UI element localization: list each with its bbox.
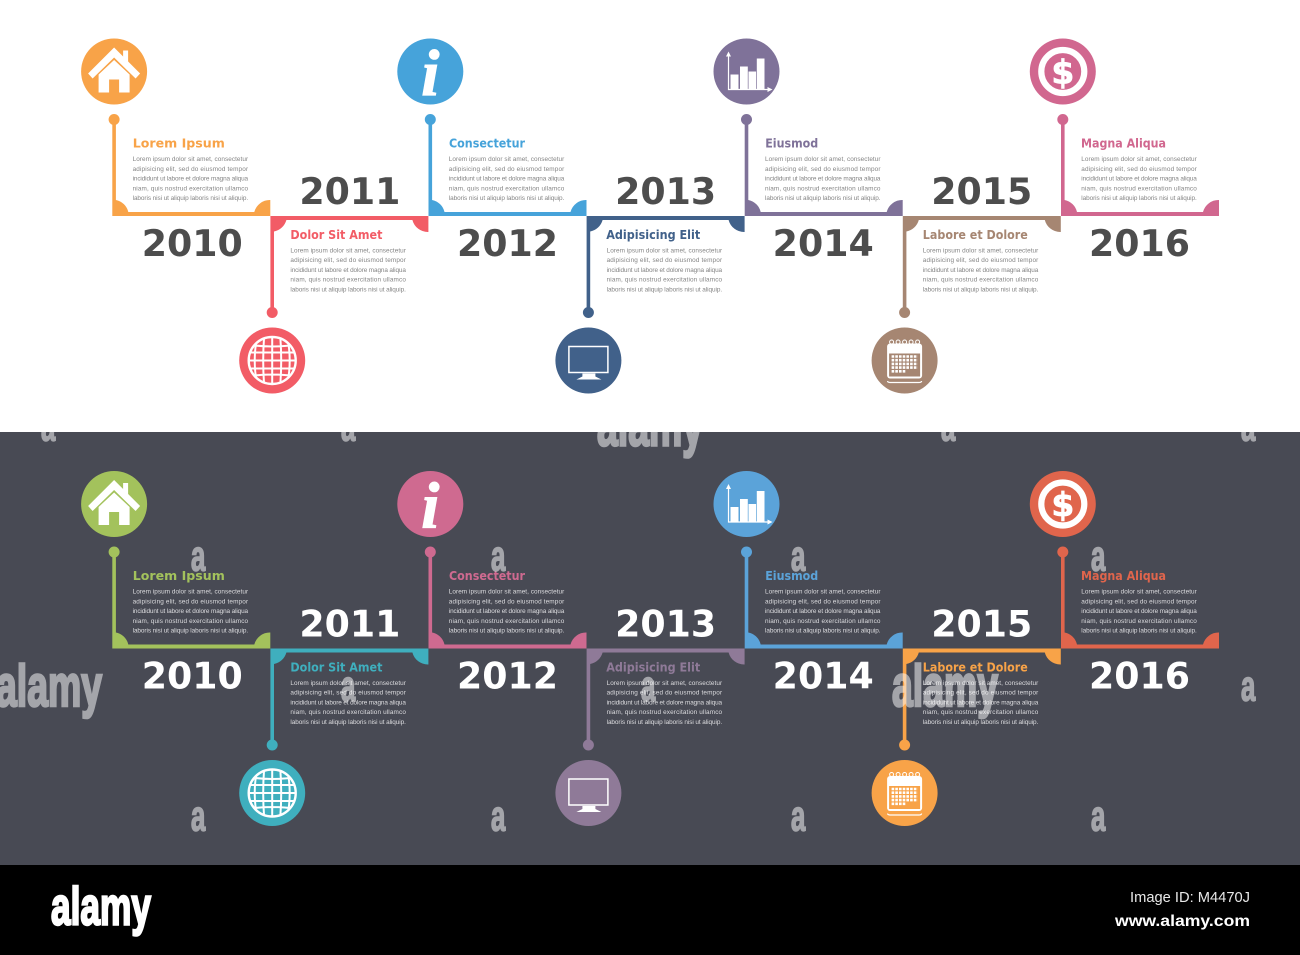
body text: incididunt ut labore et dolore magna aliqua [449,176,565,183]
icon: monitor [555,328,621,394]
body text: Lorem ipsum dolor sit amet, consectetur [923,247,1039,254]
body text [765,156,881,202]
body text [923,247,1039,293]
icon: calendar [872,328,938,394]
watermarks: a [191,532,206,580]
body text: incididunt ut labore et dolore magna aliqua [449,608,565,615]
connector line [270,648,428,745]
heading: Labore et Dolore [923,660,1028,674]
body text [923,680,1039,726]
year: 2012 [457,654,558,698]
body text [290,247,407,293]
year: 2010 [142,654,243,698]
heading: Consectetur [449,137,525,151]
watermarks: a [341,662,356,710]
heading: Adipisicing Elit [606,660,700,674]
body text: niam, quis nostrud exercitation ullamco [290,709,406,716]
icon: calendar [872,760,938,826]
timeline item: 2012 Consectetur [397,470,586,698]
heading: Magna Aliqua [1081,569,1166,583]
connector line [112,552,270,648]
watermarks: a [491,792,506,840]
connector line [270,216,428,312]
connector line [1061,120,1219,216]
icon: info: i [421,470,440,542]
body text: laboris nisi ut aliquip laboris nisi ut aliquip. [607,286,722,293]
icon: bar chart [714,38,780,104]
body text [765,588,881,635]
body text: laboris nisi ut aliquip laboris nisi ut aliquip. [290,286,406,293]
website: www.alamy.com [1114,913,1250,930]
body text: adipisicing elit, sed do eiusmod tempor [923,690,1039,696]
body text: laboris nisi ut aliquip laboris nisi ut aliquip. [765,628,881,635]
body text: Lorem ipsum dolor sit amet, consectetur [923,680,1039,687]
body text: incididunt ut labore et dolore magna aliqua [1081,608,1197,615]
year: 2013 [615,170,716,213]
connector dot [267,307,278,318]
body text: incididunt ut labore et dolore magna aliqua [765,176,881,183]
body text: adipisicing elit, sed do eiusmod tempor [449,166,565,173]
year: 2015 [931,602,1032,646]
body text: adipisicing elit, sed do eiusmod tempor [449,598,565,605]
icon: info [397,470,463,542]
body text: incididunt ut labore et dolore magna aliqua [133,176,249,183]
timeline item: 2016 Magna Aliqua [1030,38,1219,265]
connector line [587,648,745,745]
body text [1081,588,1198,635]
watermarks: a [791,532,806,580]
body text: adipisicing elit, sed do eiusmod tempor [290,257,407,264]
connector line [428,120,586,216]
body text: incididunt ut labore et dolore magna aliqua [607,267,723,274]
watermarks: a [941,402,956,450]
body text: incididunt ut labore et dolore magna aliqua [923,267,1039,274]
body text: laboris nisi ut aliquip laboris nisi ut aliquip. [133,628,248,635]
body text [607,680,723,726]
timeline item: 2013 Adipisicing Elit [555,170,745,394]
body text: niam, quis nostrud exercitation ullamco [290,277,406,284]
heading: Dolor Sit Amet [290,660,383,674]
body text: adipisicing elit, sed do eiusmod tempor [765,166,881,173]
body text: adipisicing elit, sed do eiusmod tempor [607,257,723,264]
timeline item: 2012 Consectetur [397,37,586,265]
body text: Lorem ipsum dolor sit amet, consectetur [765,156,881,163]
body text: niam, quis nostrud exercitation ullamco [449,185,565,192]
watermarks: a [1091,792,1106,840]
body text: laboris nisi ut aliquip laboris nisi ut aliquip. [923,719,1039,726]
body text: Lorem ipsum dolor sit amet, consectetur [449,156,565,163]
year: 2011 [299,170,400,213]
watermarks: a [191,792,206,840]
heading: Labore et Dolore [923,228,1028,242]
body text: niam, quis nostrud exercitation ullamco [449,618,565,625]
body text: niam, quis nostrud exercitation ullamco [765,618,881,625]
background: white panel [0,0,1300,432]
timeline item: 2014 Eiusmod [714,471,903,698]
watermarks: alamy [597,394,703,459]
body text: incididunt ut labore et dolore magna aliqua [290,267,406,274]
icon: house [81,38,147,104]
year: 2014 [773,222,874,265]
heading: Lorem Ipsum [133,137,225,151]
body text: niam, quis nostrud exercitation ullamco [133,185,249,192]
connector line [428,552,586,648]
year: 2015 [931,170,1032,213]
body text: incididunt ut labore et dolore magna aliqua [607,699,723,706]
body text [449,588,565,635]
connector dot [109,546,120,558]
body text: adipisicing elit, sed do eiusmod tempor [133,166,249,173]
icon: globe [239,328,305,394]
year: 2014 [773,654,874,698]
body text [290,680,407,726]
connector dot [1057,114,1068,125]
body text: incididunt ut labore et dolore magna aliqua [923,699,1039,706]
body text: Lorem ipsum dolor sit amet, consectetur [607,680,723,687]
body text: niam, quis nostrud exercitation ullamco [607,709,723,716]
connector dot [425,546,436,558]
connector dot [899,740,910,750]
connector line [903,648,1061,745]
heading: Magna Aliqua [1081,137,1166,151]
body text: adipisicing elit, sed do eiusmod tempor [133,598,249,605]
panel: dark timeline [81,470,1219,826]
body text: Lorem ipsum dolor sit amet, consectetur [607,247,723,254]
watermarks: a [1091,532,1106,580]
icon: bar chart [714,471,780,537]
body text: Lorem ipsum dolor sit amet, consectetur [133,156,249,163]
connector dot [741,114,752,125]
connector line [903,216,1061,312]
icon: dollar coin: $ [1051,52,1074,92]
icon: house [81,471,147,537]
body text: Lorem ipsum dolor sit amet, consectetur [1081,588,1198,596]
body text [133,156,249,202]
body text: adipisicing elit, sed do eiusmod tempor [765,598,881,605]
body text: laboris nisi ut aliquip laboris nisi ut aliquip. [607,719,722,726]
icon: info [397,37,463,110]
timeline item: 2015 Labore et Dolore [872,170,1061,394]
connector dot [267,740,278,750]
body text [449,156,565,202]
body text: adipisicing elit, sed do eiusmod tempor [1081,598,1198,605]
heading: Lorem Ipsum [133,569,225,583]
icon: dollar coin [1030,38,1096,104]
year: 2013 [615,602,716,646]
body text: laboris nisi ut aliquip laboris nisi ut aliquip. [449,628,565,635]
heading: Adipisicing Elit [606,228,700,242]
body text: niam, quis nostrud exercitation ullamco [923,709,1039,716]
body text: incididunt ut labore et dolore magna aliqua [765,608,881,615]
watermarks: a [341,402,356,450]
body text: Lorem ipsum dolor sit amet, consectetur [449,588,565,596]
connector line [1061,552,1219,648]
icon: dollar coin [1030,471,1096,537]
watermarks: a [491,532,506,580]
footer logo: alamy [51,876,151,936]
watermarks: a [641,662,656,710]
heading: Eiusmod [765,569,818,583]
connector line [745,552,903,648]
body text: adipisicing elit, sed do eiusmod tempor [923,257,1039,264]
watermarks: a [1241,402,1256,450]
connector dot [109,114,120,125]
footer bar [0,865,1300,955]
watermarks: a [1241,662,1256,710]
timeline item: 2011 Dolor Sit Amet [239,602,428,826]
body text: niam, quis nostrud exercitation ullamco [923,277,1039,284]
body text: adipisicing elit, sed do eiusmod tempor [290,690,407,696]
body text: niam, quis nostrud exercitation ullamco [1081,185,1197,192]
year: 2011 [299,602,400,646]
year: 2010 [142,222,243,265]
timeline item: 2013 Adipisicing Elit [555,602,745,826]
heading: Eiusmod [765,137,818,151]
body text [607,247,723,293]
year: 2016 [1089,222,1190,265]
connector line [112,120,270,216]
body text: Lorem ipsum dolor sit amet, consectetur [1081,156,1198,163]
icon: globe [239,760,305,826]
watermarks: a [791,792,806,840]
connector line [587,216,745,312]
body text: incididunt ut labore et dolore magna aliqua [133,608,249,615]
body text: laboris nisi ut aliquip laboris nisi ut aliquip. [1081,628,1197,635]
body text: Lorem ipsum dolor sit amet, consectetur [133,588,249,596]
body text [133,588,249,635]
body text: laboris nisi ut aliquip laboris nisi ut aliquip. [923,286,1039,293]
year: 2012 [457,222,558,265]
timeline item: 2015 Labore et Dolore [872,602,1061,826]
body text: Lorem ipsum dolor sit amet, consectetur [290,680,407,687]
connector dot [741,546,752,558]
connector line [745,120,903,216]
image id: Image ID: M4470J [1130,889,1250,906]
body text: niam, quis nostrud exercitation ullamco [765,185,881,192]
body text: laboris nisi ut aliquip laboris nisi ut aliquip. [133,195,248,202]
body text: niam, quis nostrud exercitation ullamco [1081,618,1197,625]
connector dot [425,114,436,125]
watermarks: alamy [892,655,998,719]
panel: light timeline [81,37,1219,394]
connector dot [1057,546,1068,558]
body text: adipisicing elit, sed do eiusmod tempor [1081,166,1198,173]
icon: dollar coin: $ [1051,485,1074,524]
body text [1081,156,1198,202]
body text: Lorem ipsum dolor sit amet, consectetur [290,247,407,254]
body text: laboris nisi ut aliquip laboris nisi ut aliquip. [1081,195,1197,202]
body text: laboris nisi ut aliquip laboris nisi ut aliquip. [449,195,565,202]
year: 2016 [1089,654,1190,698]
heading: Consectetur [449,569,525,583]
connector dot [583,740,594,750]
icon: info: i [421,37,440,110]
body text: niam, quis nostrud exercitation ullamco [133,618,249,625]
watermarks [0,432,1256,832]
body text: incididunt ut labore et dolore magna aliqua [1081,176,1197,183]
watermarks: a [41,402,56,450]
heading: Dolor Sit Amet [290,228,383,242]
timeline item: 2010 Lorem Ipsum [81,471,270,698]
body text: Lorem ipsum dolor sit amet, consectetur [765,588,881,596]
body text: laboris nisi ut aliquip laboris nisi ut aliquip. [765,195,881,202]
timeline item: 2010 Lorem Ipsum [81,38,270,265]
timeline item: 2011 Dolor Sit Amet [239,170,428,394]
timeline item: 2014 Eiusmod [714,38,903,265]
body text: incididunt ut labore et dolore magna aliqua [290,699,406,706]
body text: adipisicing elit, sed do eiusmod tempor [607,690,723,696]
body text: laboris nisi ut aliquip laboris nisi ut aliquip. [290,719,406,726]
connector dot [583,307,594,318]
icon: monitor [555,760,621,826]
background: dark panel [0,432,1300,865]
timeline item: 2016 Magna Aliqua [1030,471,1219,698]
body text: niam, quis nostrud exercitation ullamco [607,277,723,284]
connector dot [899,307,910,318]
